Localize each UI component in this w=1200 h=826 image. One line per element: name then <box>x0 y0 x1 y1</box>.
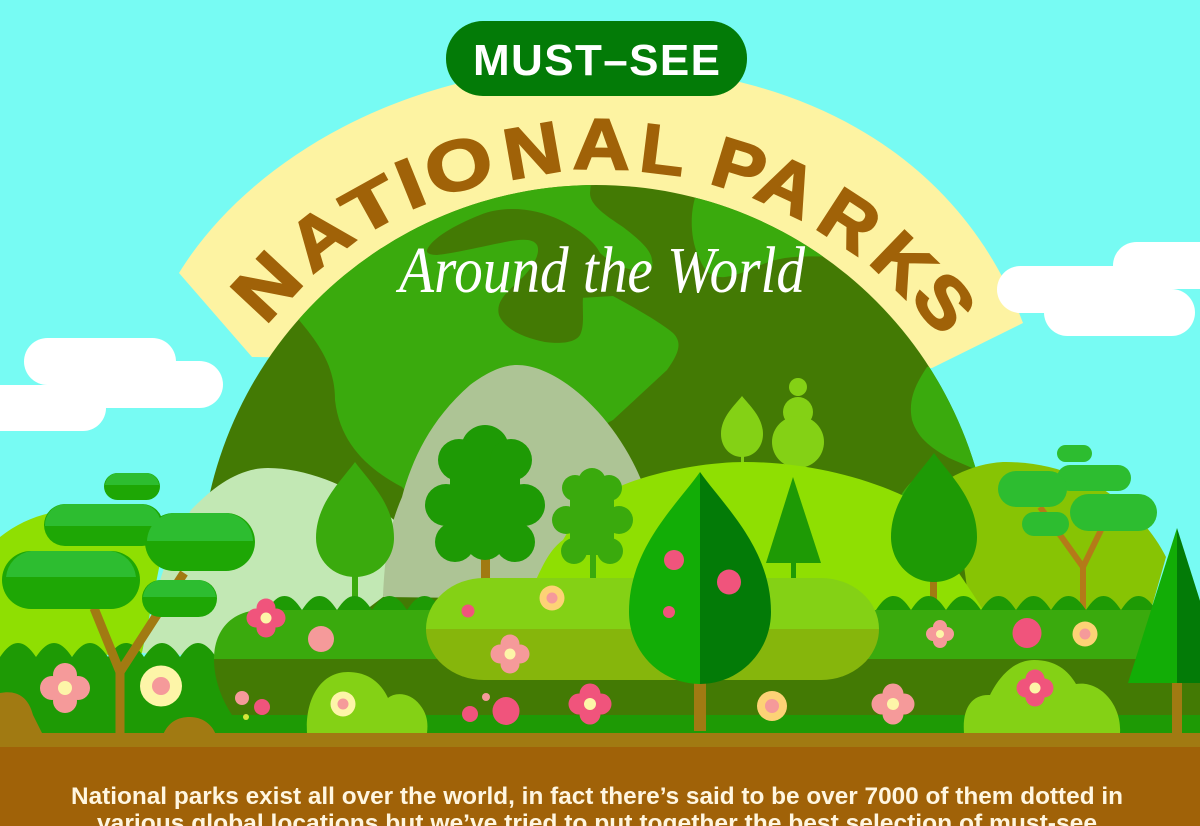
heading: National Parks: N <box>497 106 568 196</box>
tree: right teardrop <box>891 453 977 604</box>
subheading: Around the World: Around the World <box>396 234 806 307</box>
hills: background <box>0 365 960 660</box>
heading: National Parks: T <box>329 161 413 251</box>
globe with continents <box>210 185 976 610</box>
intro text <box>71 783 1123 826</box>
bush: right <box>964 660 1120 733</box>
heading: National Parks: N <box>216 236 317 337</box>
tree: small oak <box>552 468 633 580</box>
heading: National Parks: A <box>572 104 631 185</box>
target: yellow lower <box>757 691 787 721</box>
badge: Must-See <box>446 21 747 96</box>
left ground mounds <box>0 692 216 735</box>
tree: right bonsai <box>998 445 1157 612</box>
clouds: left <box>0 338 223 431</box>
tree: left bonsai <box>2 473 255 735</box>
tree: right fir <box>1128 528 1200 734</box>
badge: Must-See: MUST–SEE <box>473 36 720 85</box>
tree: small fir <box>766 477 821 579</box>
target: on left bush <box>330 692 356 716</box>
banner: curved cream ribbon <box>179 66 1023 368</box>
heading: National Parks: P <box>703 121 776 212</box>
flower: salmon lower right <box>872 684 914 724</box>
berries: lower centre <box>462 693 520 725</box>
flower: pink hedge <box>246 598 286 638</box>
heading: National Parks: R <box>805 172 895 270</box>
ground: soil <box>0 733 1200 826</box>
tree: large oak <box>425 425 545 580</box>
target: lemon left <box>140 666 182 706</box>
flowers and berries <box>40 586 1098 725</box>
heading: National Parks: O <box>416 118 501 212</box>
flower: salmon left <box>40 663 90 713</box>
clouds: right <box>997 242 1200 336</box>
hedge band: layered green <box>214 610 1200 715</box>
heading: National Parks <box>216 104 992 348</box>
heading: National Parks: K <box>856 217 950 311</box>
heading: National Parks: L <box>636 110 690 191</box>
flower: salmon centre <box>490 634 530 674</box>
heading: National Parks: A <box>745 137 831 235</box>
small trees on horizon <box>721 378 824 468</box>
heading: National Parks: S <box>897 257 992 348</box>
hills: right olive and centre lime <box>536 462 1166 610</box>
heading: National Parks: A <box>273 189 368 287</box>
tree: left teardrop <box>316 462 394 602</box>
berries: right hedge <box>1012 618 1098 648</box>
island <box>427 209 601 343</box>
intro text: National parks exist all over the world, in fact there’s said to be over 7000 of them dotted in <box>71 783 1123 810</box>
berries: lime hedge <box>462 586 564 618</box>
ground band: scalloped hedges <box>0 596 1200 733</box>
berry cluster left <box>235 626 334 720</box>
bush: left <box>307 672 427 733</box>
heading: National Parks: I <box>385 144 436 225</box>
flower: pink lower centre <box>568 684 612 724</box>
flower: salmon right hedge <box>926 620 954 648</box>
centre lime hedge <box>426 578 879 680</box>
tree: centre teardrop with fruit <box>629 472 771 731</box>
flower: pink on right bush <box>1016 670 1054 706</box>
